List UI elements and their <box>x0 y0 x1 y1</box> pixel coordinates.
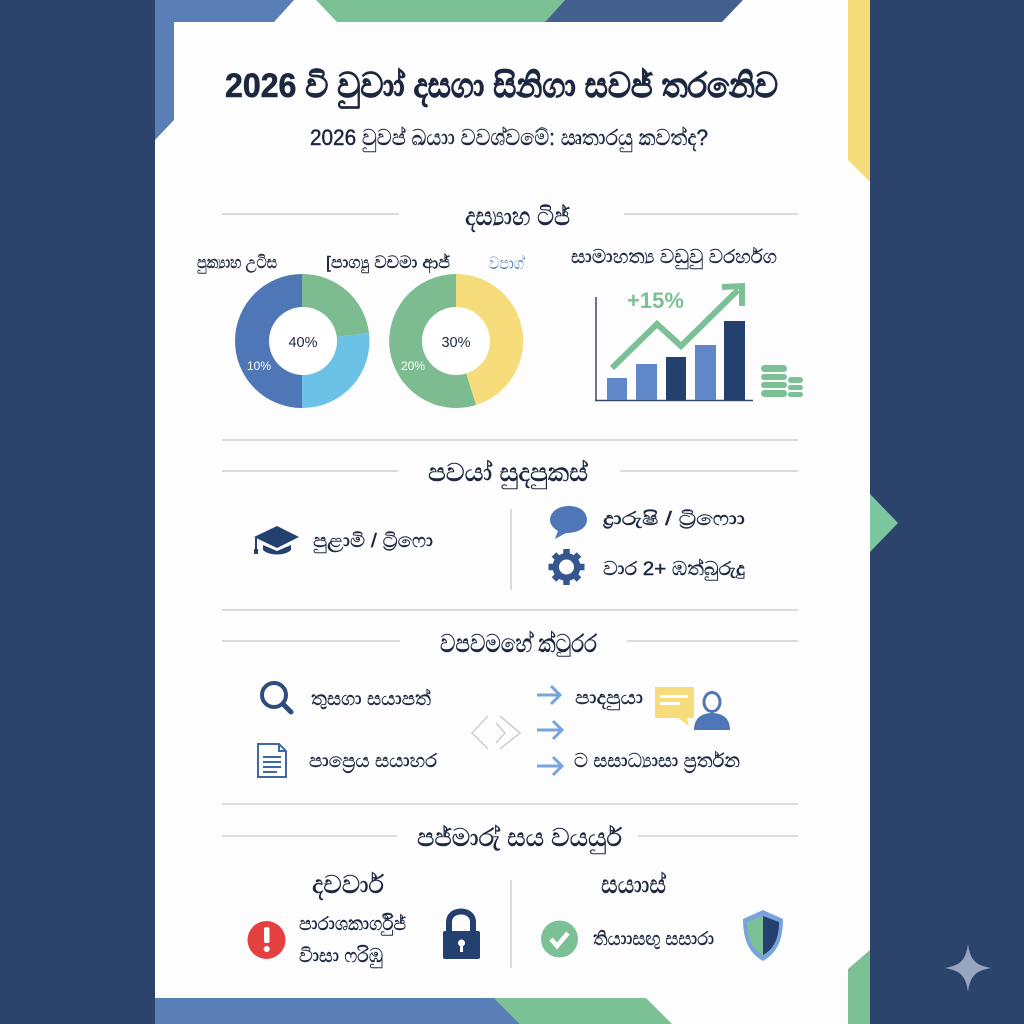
arrows <box>537 686 562 775</box>
title: 2026 වි වුවාා් දසගා සිනිගා සවජ් තරනෙිව <box>225 66 778 108</box>
warning text <box>299 914 406 968</box>
item: diploma: ද්‍රාරුෂි / ට්‍රිෆොා <box>602 509 745 530</box>
subtitle: 2026 වුවප් ඛයාා වවශ්වමේ: ඍතාරයු කවත්ද? <box>310 125 708 152</box>
icon: warning <box>248 921 286 959</box>
icon: padlock <box>443 912 480 959</box>
bar chart: +15% <box>627 288 684 313</box>
right yellow band <box>848 0 870 182</box>
item: final step: ට සසාධ්‍යාසා ප්‍රර්තන <box>574 751 740 773</box>
donut label 3: වපාග් <box>489 254 525 273</box>
chart title: සාමාහත්‍ය වඩුවු වරර්හග <box>571 247 777 269</box>
icon: gear <box>548 549 584 585</box>
column head: left: දචවාර් <box>312 871 384 900</box>
top left blue corner <box>155 0 294 140</box>
item: resume: පාප්‍රෙය සයාහර <box>309 751 438 773</box>
donut chart 1: 10% <box>247 359 271 373</box>
bottom blue band <box>155 998 520 1024</box>
donut chart 2: 30% <box>441 335 471 351</box>
donut chart 2 <box>389 274 523 408</box>
icon: diamond chevrons <box>472 716 520 749</box>
section 4 heading: පජ්මාරු් සය වයයුර් <box>417 824 622 854</box>
donut chart 1: 40% <box>288 335 318 351</box>
top green band <box>316 0 565 22</box>
icon: coins <box>761 365 803 397</box>
item: interview: පාදපුයා <box>575 688 643 711</box>
donut label 2: [පාග්‍යු වචමා ආජ් <box>326 253 450 274</box>
icon: document <box>258 744 286 777</box>
icon: speech bubble <box>550 506 587 539</box>
panel: white page <box>155 0 870 1024</box>
bar chart <box>595 286 753 401</box>
divider <box>222 803 798 805</box>
item: degree: පුළාමි / ට්‍රිෆො <box>313 531 433 554</box>
donut chart 2: 20% <box>401 359 425 373</box>
donut chart 1 <box>235 274 369 408</box>
section 1 heading: දස්‍යාහ ටිජ් <box>465 203 570 232</box>
item: search: තුසගා සයාපත් <box>311 688 431 710</box>
vertical divider <box>510 880 512 968</box>
warning text: පාරාශකාර්ගිුජ් <box>299 914 406 935</box>
right green notch <box>870 494 898 552</box>
top navy band <box>545 0 743 22</box>
column head: right: සයාාස් <box>601 871 666 899</box>
icon: check <box>541 920 578 958</box>
section 2 heading: පවයා් සුදපුකස් <box>428 459 588 489</box>
icon: shield <box>743 910 783 961</box>
divider <box>222 609 798 611</box>
item: experience: වාර 2+ ඹත්බුරුදු <box>603 558 746 581</box>
bottom green band <box>494 998 672 1024</box>
donut label 1: පුක්‍යාහ උටිස <box>197 253 277 273</box>
divider <box>222 439 798 441</box>
vertical divider <box>510 509 512 590</box>
icon: chat and person <box>655 687 730 730</box>
bottom right green band <box>848 950 870 1024</box>
section 3 heading: වපවමහේ ක්ටුරර <box>440 630 597 658</box>
safe text: තියාාසඟු සසාරා <box>593 929 714 950</box>
warning text: විාසා ෆරිඹු <box>299 946 383 968</box>
star mark <box>944 944 992 992</box>
icon: graduation cap <box>254 526 299 554</box>
icon: magnifier <box>262 683 291 712</box>
